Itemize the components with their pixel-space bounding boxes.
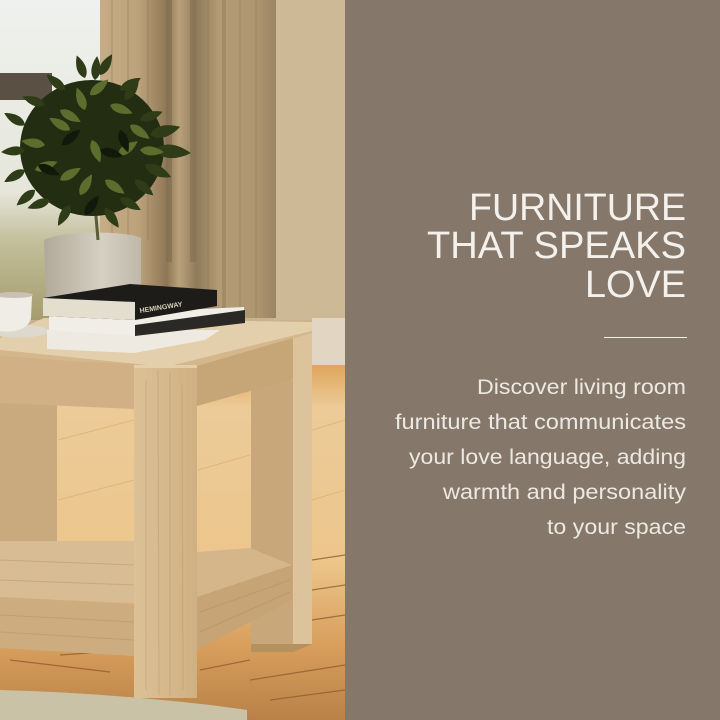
coffee cup and saucer	[0, 292, 49, 338]
front leg	[134, 365, 197, 698]
body text: furniture that communicates	[395, 411, 686, 434]
curtain	[100, 0, 276, 318]
table top and apron	[0, 318, 312, 409]
lower shelf	[0, 541, 292, 656]
top black book	[43, 284, 217, 320]
back right leg	[251, 333, 312, 652]
heading: FURNITURE	[469, 187, 686, 229]
bottom white book	[47, 330, 220, 353]
heading: THAT SPEAKS	[427, 225, 686, 267]
body text: warmth and personality	[442, 481, 687, 504]
body text	[395, 376, 687, 539]
middle white book	[49, 307, 245, 336]
back left leg	[0, 403, 57, 545]
body text: to your space	[547, 516, 686, 539]
plant pot	[44, 233, 141, 300]
right panel	[345, 0, 720, 720]
room background	[0, 0, 345, 720]
side table	[0, 318, 312, 698]
heading: LOVE	[585, 264, 686, 306]
wood floor	[0, 365, 345, 720]
stack of books	[43, 284, 245, 353]
window	[0, 0, 101, 320]
body text: your love language, adding	[409, 446, 686, 469]
heading	[427, 187, 686, 306]
body text: Discover living room	[477, 376, 686, 399]
stack of books: HEMINGWAY	[139, 301, 183, 315]
divider	[604, 337, 687, 338]
rug	[0, 690, 247, 720]
plant foliage	[1, 52, 191, 240]
